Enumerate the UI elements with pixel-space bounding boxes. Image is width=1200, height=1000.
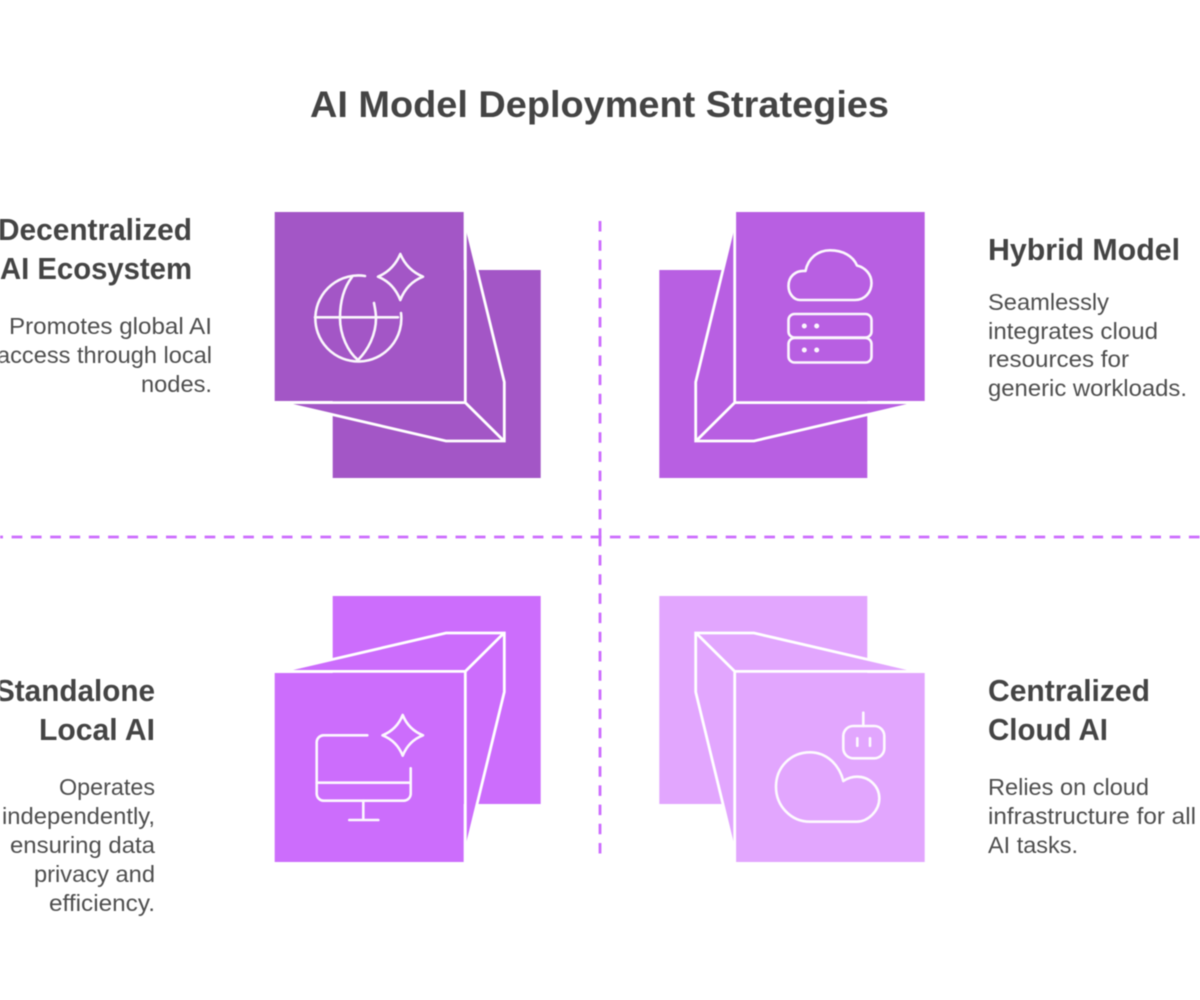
panel: standalone local AI cube [275,596,541,862]
icon: cloud above server [788,250,872,362]
text: standalone description [2,774,155,916]
text: centralized description: Relies on cloud [988,774,1149,800]
text: standalone description: independently, [2,803,155,829]
text: hybrid description: Seamlessly [988,289,1109,315]
panel: hybrid model cube [659,212,925,478]
icon: cloud with robot [776,713,884,822]
text: centralized description: AI tasks. [988,832,1078,858]
panel: centralized cloud AI cube [659,596,925,862]
text: centralized description: infrastructure for all [988,803,1196,829]
heading: centralized cloud AI: Centralized [988,673,1150,708]
heading: centralized cloud AI [988,673,1150,747]
heading: decentralized AI ecosystem: AI Ecosystem [0,251,192,286]
panel: decentralized AI ecosystem cube [275,212,541,478]
text: standalone description: privacy and [34,861,155,887]
text: centralized description [988,774,1196,858]
text: hybrid description [988,289,1187,401]
heading: standalone local AI: Local AI [39,712,155,747]
text: hybrid description: resources for [988,346,1129,372]
dashed horizontal divider [0,536,1200,538]
text: decentralized description [0,313,212,397]
text: standalone description: efficiency. [49,890,155,916]
text: standalone description: Operates [59,774,155,800]
heading: centralized cloud AI: Cloud AI [988,712,1108,747]
heading: decentralized AI ecosystem [0,212,192,286]
dashed vertical divider, lower part [599,536,601,854]
text: decentralized description: Promotes global AI [9,313,212,339]
text: decentralized description: nodes. [141,371,212,397]
heading: standalone local AI [0,673,155,747]
dashed vertical divider, upper part [599,221,601,538]
heading: hybrid model: Hybrid Model [988,232,1180,267]
text: hybrid description: integrates cloud [988,318,1158,344]
title: AI Model Deployment Strategies [310,84,889,125]
icon: globe with sparkle [315,254,423,361]
text: decentralized description: access through local [0,342,212,368]
heading: standalone local AI: Standalone [0,673,155,708]
heading: decentralized AI ecosystem: Decentralized [0,212,192,247]
text: hybrid description: generic workloads. [988,375,1187,401]
text: standalone description: ensuring data [10,832,155,858]
icon: monitor with sparkle [317,715,423,820]
